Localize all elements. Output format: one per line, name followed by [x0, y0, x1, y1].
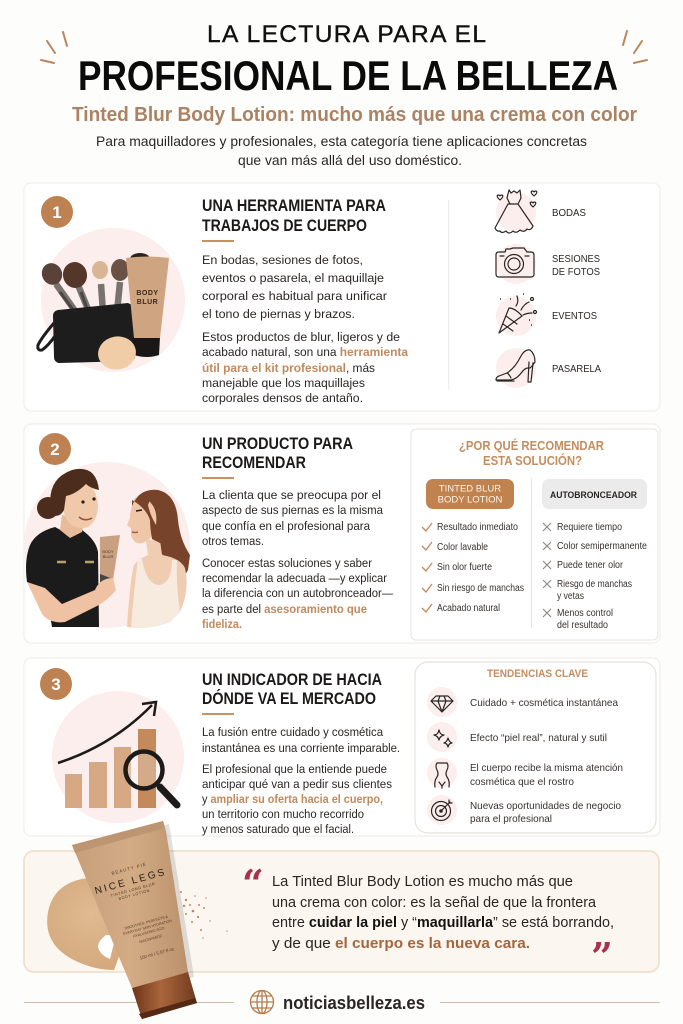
body text: manejable que los maquillajes: [202, 376, 365, 390]
illustration: professional and client: BODY: [102, 549, 114, 554]
illustration: makeup kit: [38, 228, 185, 373]
body text: eventos o pasarela, el maquillaje: [202, 271, 384, 285]
trend: cuerpo: cosmética que el rostro: [470, 776, 574, 788]
quote text: una crema con color: es la señal de que la frontera: [272, 895, 597, 911]
body text: y ampliar su oferta hacia el cuerpo,: [202, 792, 383, 806]
list: autobronceador drawbacks: Puede tener olor: [557, 560, 624, 571]
trend: oportunidades: Nuevas oportunidades de negocio: [470, 800, 621, 812]
icon: body: [427, 758, 457, 788]
tube label: TINTED LONG BLUR: [110, 882, 156, 898]
number badge 3: [40, 668, 72, 700]
number badge 2: [39, 433, 71, 465]
list: tinted blur benefits: Sin riesgo de manchas: [437, 583, 524, 594]
body text: fideliza.: [202, 617, 242, 631]
body text: es parte del asesoramiento que: [202, 602, 367, 616]
label: sesiones de fotos: [552, 254, 600, 278]
pill: tinted blur: BODY LOTION: [438, 494, 503, 506]
list: autobronceador drawbacks: del resultado: [557, 620, 608, 631]
icon: target: [427, 795, 457, 825]
header: [41, 21, 647, 168]
heading: TRABAJOS DE CUERPO: [202, 217, 367, 235]
label: bodas: BODAS: [552, 208, 586, 219]
icon: camera: [496, 244, 536, 284]
list: tinted blur benefits: Acabado natural: [437, 603, 500, 614]
pro: [37, 497, 59, 519]
comparison title: [459, 438, 604, 468]
list: tinted blur benefits: Sin olor fuerte: [437, 562, 492, 573]
heading: [202, 197, 386, 235]
heading: [202, 671, 382, 708]
label: sesiones de fotos: DE FOTOS: [552, 267, 600, 278]
product swatch: [47, 878, 144, 970]
icon: party popper: [496, 294, 536, 336]
body text: corporales densos de antaño.: [202, 391, 363, 405]
body text: acabado natural, son una herramienta: [202, 345, 408, 359]
heading: DÓNDE VA EL MERCADO: [202, 689, 376, 708]
body text: [202, 253, 408, 405]
list: tinted blur benefits: [422, 522, 524, 614]
website: noticiasbelleza.es: [283, 993, 425, 1013]
pill: tinted blur: TINTED BLUR: [439, 484, 501, 494]
comparison title: ESTA SOLUCIÓN?: [483, 453, 582, 468]
number badge 3: 3: [51, 675, 61, 694]
label: pasarela: PASARELA: [552, 364, 601, 375]
body text: anticipar qué van a pedir sus clientes: [202, 777, 392, 791]
body text: [202, 488, 394, 631]
comparison title: ¿POR QUÉ RECOMENDAR: [459, 438, 604, 453]
pill: autobronceador: [542, 479, 647, 509]
trend: oportunidades: [470, 800, 621, 825]
trends title: TENDENCIAS CLAVE: [487, 668, 588, 680]
trend: cuidado: Cuidado + cosmética instantánea: [470, 697, 618, 709]
tube label: BODY LOTION: [118, 889, 151, 901]
client: [132, 490, 190, 580]
tube label: NICE LEGS: [94, 867, 168, 897]
body text: Estos productos de blur, ligeros y de: [202, 330, 400, 344]
white cream highlight: [98, 935, 116, 959]
body text: la diferencia con un autobronceador—: [202, 586, 394, 600]
panel: section 2: [24, 424, 660, 643]
heading: UN PRODUCTO PARA: [202, 435, 353, 453]
decorative sparks left: [41, 32, 67, 63]
heading: RECOMENDAR: [202, 454, 306, 472]
panel: comparison: [411, 429, 658, 640]
heading: [202, 435, 353, 472]
illustration: makeup kit: BLUR: [137, 299, 158, 306]
list: autobronceador drawbacks: Menos control: [557, 608, 613, 619]
trend: oportunidades: para el profesional: [470, 813, 552, 825]
heading rule: [202, 713, 234, 715]
list: autobronceador drawbacks: Requiere tiempo: [557, 522, 622, 533]
body text: instantánea es una corriente imparable.: [202, 741, 400, 755]
illustration: makeup kit: BODY: [136, 290, 159, 297]
quote text: [272, 874, 614, 952]
trend: piel real: Efecto “piel real”, natural y sutil: [470, 732, 607, 744]
body text: Conocer estas soluciones y saber: [202, 556, 372, 570]
illustration: professional and client: BLUR: [103, 554, 113, 559]
panel: closing quote: [24, 851, 659, 979]
number badge 2: 2: [50, 440, 60, 459]
intro text: Para maquilladores y profesionales, esta categoría tiene aplicaciones concretas: [96, 133, 587, 149]
product tube: [72, 821, 197, 1019]
tube and hand: [100, 535, 120, 580]
tube label: EVERYDAY SKIN HYDRATION: [123, 919, 173, 936]
body text: útil para el kit profesional, más: [202, 361, 375, 375]
body text: el tono de piernas y brazos.: [202, 307, 355, 321]
list: tinted blur benefits: Color lavable: [437, 542, 488, 553]
tube label: [91, 857, 187, 967]
number badge 1: [41, 196, 73, 228]
tube label: NIACINAMIDE: [139, 934, 163, 944]
body text: En bodas, sesiones de fotos,: [202, 253, 363, 267]
quote text: entre cuidar la piel y “maquillarla” se está borrando,: [272, 915, 614, 931]
body text: y menos saturado que el facial.: [202, 822, 354, 836]
intro text: que van más allá del uso doméstico.: [238, 152, 462, 168]
pill: autobronceador: AUTOBRONCEADOR: [550, 490, 637, 501]
panel: section 3: [24, 658, 660, 836]
heading rule: [202, 477, 234, 479]
tube label: SMOOTHES, PERFECTS &: [124, 915, 169, 931]
body text: un territorio con mucho recorrido: [202, 807, 364, 821]
trend: cuerpo: El cuerpo recibe la misma atención: [470, 762, 623, 774]
list: autobronceador drawbacks: Riesgo de manchas: [557, 579, 632, 590]
trend: cuerpo: [470, 762, 623, 788]
tube label: BEAUTY PIE: [111, 861, 147, 876]
tube label: HYALURONIC ACID: [133, 926, 166, 939]
tube label: 150 ml / 5.07 fl oz: [139, 946, 175, 961]
opening quote mark: “: [242, 861, 264, 906]
illustration: professional and client: [24, 462, 190, 628]
body text: La fusión entre cuidado y cosmética: [202, 725, 383, 739]
body text: otros temas.: [202, 534, 264, 548]
heading rule: [202, 240, 234, 242]
icon: sparkles: [427, 722, 457, 752]
label: eventos: EVENTOS: [552, 311, 597, 322]
list: autobronceador drawbacks: y vetas: [557, 591, 584, 602]
quote text: y de que el cuerpo es la nueva cara.: [272, 936, 530, 952]
icon: globe: [250, 990, 274, 1014]
list: tinted blur benefits: Resultado inmediato: [437, 522, 518, 533]
list: autobronceador drawbacks: Color semipermanente: [557, 541, 647, 552]
heading: UNA HERRAMIENTA PARA: [202, 197, 386, 215]
body text: que confía en el profesional para: [202, 519, 370, 533]
icon: wedding dress: [495, 190, 537, 233]
icon: high heel: [496, 348, 536, 388]
body text: La clienta que se preocupa por el: [202, 488, 381, 502]
subtitle: Tinted Blur Body Lotion: mucho más que una crema con color: [72, 104, 637, 126]
pill: tinted blur: [426, 479, 514, 509]
closing quote mark: ”: [591, 934, 613, 979]
illustration: growth chart: [52, 691, 184, 823]
body text: [202, 725, 400, 836]
footer: [24, 990, 660, 1014]
use case list: [495, 190, 601, 388]
body text: aspecto de sus piernas es la misma: [202, 503, 383, 517]
heading: UN INDICADOR DE HACIA: [202, 671, 382, 689]
quote text: La Tinted Blur Body Lotion es mucho más que: [272, 874, 573, 890]
panel: key trends: [415, 662, 656, 833]
decorative sparks right: [623, 31, 647, 63]
body text: recomendar la adecuada —y explicar: [202, 571, 387, 585]
body text: El profesional que la entiende puede: [202, 762, 387, 776]
intro text: [96, 133, 587, 168]
number badge 1: 1: [52, 203, 62, 222]
list: autobronceador drawbacks: [543, 522, 647, 631]
icon: diamond: [427, 687, 457, 717]
label: sesiones de fotos: SESIONES: [552, 254, 600, 265]
panel: section 1: [24, 183, 660, 411]
product powder particles: [180, 891, 228, 939]
title line 1: LA LECTURA PARA EL: [207, 21, 486, 48]
body text: corporal es habitual para unificar: [202, 289, 387, 303]
